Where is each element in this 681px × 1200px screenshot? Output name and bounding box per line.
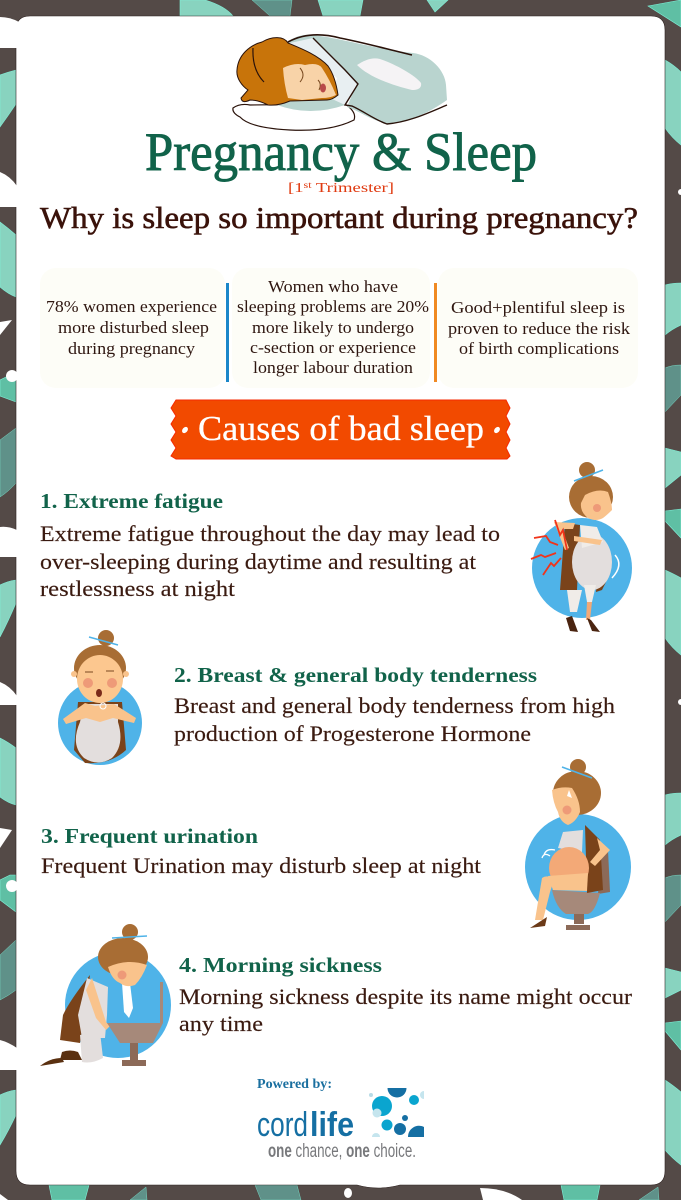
subtitle: Trimester]	[312, 181, 394, 196]
stat box 2: c-section or experience	[250, 338, 416, 357]
stat box 2: sleeping problems are 20%	[237, 297, 429, 316]
icon: woman on toilet	[525, 759, 631, 930]
cordlife logo: life	[310, 1106, 354, 1144]
cordlife logo: one chance, one choice.	[268, 1141, 416, 1162]
ribbon heading: causes of bad sleep: Causes of bad sleep	[198, 409, 484, 448]
subtitle: [1	[288, 181, 300, 196]
icon: woman with tender breasts	[58, 630, 142, 765]
cause 1 text: 1. Extreme fatigue	[40, 489, 223, 513]
white leaf shapes on left border	[0, 17, 19, 1070]
stat box 1: more disturbed sleep	[58, 318, 209, 337]
cause 1 text: Extreme fatigue throughout the day may lead to	[40, 521, 500, 546]
stat box 3: of birth complications	[459, 339, 619, 358]
stat box 2: longer labour duration	[253, 358, 414, 377]
panel: statistics	[40, 268, 638, 388]
stat box 1	[40, 268, 225, 388]
question heading: Why is sleep so important during pregnancy?	[40, 200, 638, 235]
cause 2 text: 2. Breast & general body tenderness	[174, 663, 537, 687]
cause 4 text: any time	[179, 1011, 263, 1036]
stat box 2: more likely to undergo	[252, 318, 414, 337]
cause 1 text	[40, 489, 500, 601]
cause 3 text: 3. Frequent urination	[41, 824, 258, 848]
cause 2 text: Breast and general body tenderness from high	[174, 693, 615, 718]
cause 2 text: production of Progesterone Hormone	[174, 721, 531, 746]
cause 2 text	[174, 663, 615, 746]
icon: woman with morning sickness	[40, 924, 171, 1066]
icon: sleeping woman	[233, 35, 447, 130]
stat box 2	[232, 268, 430, 388]
cause 3 text	[41, 824, 481, 878]
subtitle: st	[304, 180, 312, 190]
powered by label: Powered by:	[257, 1077, 332, 1092]
stat box 3	[438, 268, 638, 388]
cause 1 text: restlessness at night	[40, 576, 235, 601]
cordlife logo	[257, 1088, 424, 1162]
ribbon heading: causes of bad sleep	[171, 400, 510, 459]
cause 4 text	[179, 953, 633, 1036]
title: Pregnancy & Sleep	[145, 122, 537, 182]
stat box 1: 78% women experience	[46, 297, 217, 316]
stat box 1: during pregnancy	[68, 339, 196, 358]
cause 3 text: Frequent Urination may disturb sleep at night	[41, 853, 481, 878]
icon: woman with back pain	[531, 462, 632, 632]
stat box 2: Women who have	[268, 277, 398, 296]
stat box 3: proven to reduce the risk	[448, 319, 631, 338]
cause 1 text: over-sleeping during daytime and resulting at	[40, 549, 476, 574]
stat box 3: Good+plentiful sleep is	[451, 298, 625, 317]
cause 4 text: 4. Morning sickness	[179, 953, 382, 977]
cordlife logo: cord	[257, 1106, 308, 1144]
cause 4 text: Morning sickness despite its name might occur	[179, 984, 633, 1009]
